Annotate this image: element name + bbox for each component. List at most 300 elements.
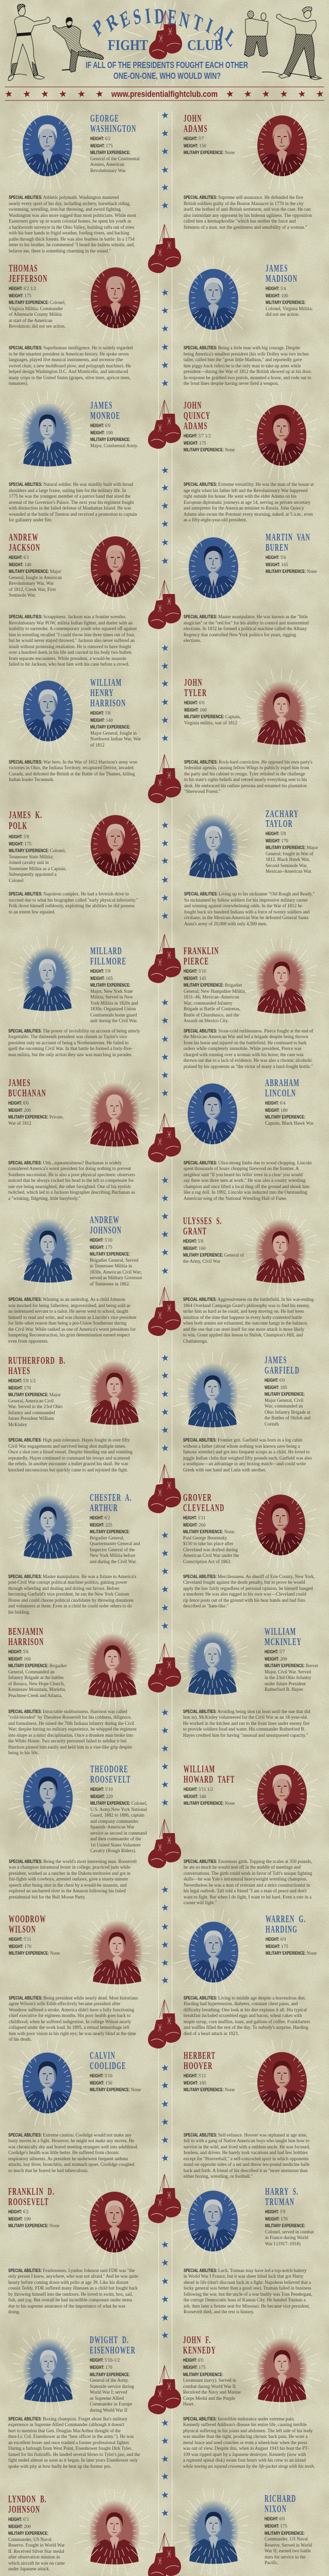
name and stats: Continentals home guard bbox=[90, 1012, 137, 1018]
name and stats: 175 bbox=[105, 1245, 112, 1250]
special abilities bbox=[8, 2575, 138, 2576]
name and stats: ANDREW JOHNSON bbox=[90, 1214, 122, 1235]
special abilities: insult without promising retaliation. He is rumored to have fought bbox=[9, 644, 131, 649]
panel: Richard Nixon bbox=[172, 2485, 329, 2576]
special abilities bbox=[8, 2416, 140, 2469]
special abilities: Winning as an underdog. As a child Johnson bbox=[43, 1297, 125, 1302]
name and stats: Tennessee Militia as a Captain. bbox=[9, 866, 67, 871]
special abilities: corner will fight." bbox=[184, 1900, 217, 1905]
name and stats bbox=[90, 400, 138, 448]
special abilities: either boxing, wrestling, or football." bbox=[184, 2174, 253, 2179]
name and stats: General, fought in American bbox=[9, 575, 62, 580]
special abilities: was mocked for being fatherless, impoverished, and being sold as bbox=[8, 1303, 130, 1308]
name and stats: General; fought in War of bbox=[266, 851, 314, 856]
special abilities bbox=[9, 759, 137, 783]
name and stats: 145 bbox=[199, 976, 206, 981]
special abilities bbox=[184, 2268, 312, 2315]
name and stats bbox=[265, 2187, 325, 2247]
special abilities: and waffles filled the rest of the day. To nobody's surprise, Harding bbox=[184, 2025, 308, 2030]
special abilities: spent thousands of hours chopping firewood on the frontier. A bbox=[184, 1166, 299, 1171]
special abilities: a murderer. He was also rugged in his own way—Cleveland could bbox=[183, 1591, 306, 1597]
special abilities: the Mexican-American War and led a brigade despite being thrown bbox=[184, 1034, 308, 1039]
name and stats bbox=[9, 1913, 76, 1957]
name and stats: Reserve. Served in World bbox=[265, 2543, 312, 2548]
special abilities: charged with running over a woman with his horse; the case was bbox=[184, 1052, 304, 1057]
name and stats: MILITARY EXPERIENCE: bbox=[90, 2087, 130, 2092]
special abilities: SPECIAL ABILITIES: bbox=[9, 345, 42, 350]
special abilities: Aggressiveness on the battlefield. In his war-ending bbox=[218, 1297, 314, 1302]
special abilities: many crops to the United States (grapes, olive trees, apricot trees, bbox=[9, 375, 130, 380]
special abilities: Frontier grit. Garfield was born in a log cabin bbox=[218, 1437, 302, 1443]
name and stats: WEIGHT: bbox=[183, 1522, 198, 1528]
name and stats: MILITARY EXPERIENCE: bbox=[266, 1951, 306, 1956]
name and stats: HEIGHT: bbox=[266, 1937, 279, 1942]
special abilities bbox=[184, 482, 314, 522]
special abilities: described as "ham-like." bbox=[183, 1603, 228, 1608]
name and stats: 5'10 bbox=[105, 2073, 112, 2078]
name and stats: WEIGHT: bbox=[184, 2080, 198, 2086]
panel: James Garfield bbox=[172, 1349, 329, 1473]
name and stats: HEIGHT: bbox=[90, 2073, 104, 2078]
special abilities: the Civil War. While ranked as one of America's worst presidents for bbox=[8, 1327, 136, 1332]
boxer: Washington bbox=[8, 4, 50, 80]
name and stats: and during the Civil War. bbox=[90, 1559, 137, 1564]
special abilities: thrown out due to a lack of evidence. He was also a chronic alcoholic bbox=[184, 1058, 312, 1063]
name and stats: MILITARY EXPERIENCE: bbox=[90, 1251, 130, 1257]
special abilities: War; despite having no military experience, he whipped the regiment bbox=[8, 1726, 137, 1732]
panel: Zachary Taylor bbox=[172, 800, 329, 927]
name and stats: WEIGHT: bbox=[90, 1522, 104, 1528]
special abilities: then-Lt. Col. Eisenhower as the "best officer in the army."). He was bbox=[8, 2434, 134, 2439]
subtitle bbox=[86, 60, 248, 81]
name and stats: None bbox=[307, 1951, 317, 1956]
name and stats: Spanish–American War bbox=[90, 1824, 134, 1829]
name and stats: WARREN G. HARDING bbox=[266, 1913, 306, 1935]
name and stats: None bbox=[50, 2223, 59, 2228]
portrait bbox=[73, 2176, 156, 2268]
panel: Theodore Roosevelt bbox=[0, 1752, 158, 1901]
name and stats bbox=[266, 1913, 329, 1957]
name and stats: War. Served in the 23rd Ohio bbox=[8, 1404, 62, 1409]
special abilities: explored an uncharted river in the Amazon following his failed bbox=[9, 1888, 126, 1893]
special abilities: through wheeling and dealing and doling out favors. Before bbox=[8, 1586, 119, 1591]
name and stats: the Battles of Shiloh and bbox=[265, 1415, 310, 1420]
special abilities: chief executive for eighteen months. His poor health goes back to bbox=[9, 2013, 130, 2018]
special abilities: considered America's worst president for doing nothing to prevent bbox=[8, 1166, 131, 1171]
special abilities bbox=[8, 1574, 136, 1615]
special abilities: the party and his cabinet to resign. Tyler relished in the challenge bbox=[184, 771, 305, 776]
special abilities bbox=[183, 1437, 312, 1473]
name and stats: 6'0 bbox=[279, 2516, 285, 2521]
name and stats: Corinth bbox=[265, 1421, 279, 1427]
name and stats: 190 bbox=[24, 2216, 31, 2222]
special abilities: becoming Garfield's vice president, he ran the New York Custom bbox=[8, 1591, 129, 1597]
name and stats: under Japanese attack. bbox=[8, 2566, 50, 2571]
special abilities: civilians; in the Mexican-American War he defeated General Santa bbox=[184, 915, 308, 920]
special abilities: Living to middle age despite a horrendous diet. bbox=[218, 1995, 306, 2001]
name and stats: Ohio Infantry Brigade at bbox=[265, 1410, 310, 1415]
special abilities: Being president while nearly dead. Most historians bbox=[43, 1995, 138, 2001]
special abilities: to his state's rights beliefs and vetoed nearly everything sent to his bbox=[184, 777, 307, 782]
name and stats: MILITARY EXPERIENCE: bbox=[265, 1663, 305, 1668]
name and stats: 5'11 bbox=[24, 1937, 31, 1942]
special abilities: an excellent boxer and once trashed a former professional fighter. bbox=[8, 2440, 130, 2445]
panel: Millard Fillmore bbox=[0, 933, 158, 1059]
portrait bbox=[7, 1752, 89, 1844]
special abilities: lucky general was better than a good one). Truman failed in business bbox=[184, 2285, 311, 2291]
name and stats: RUTHERFORD B. HAYES bbox=[8, 1355, 65, 1377]
name and stats: WEIGHT: bbox=[90, 2365, 104, 2370]
name and stats: WEIGHT: bbox=[265, 2523, 279, 2529]
name and stats: Virginia militia, war of 1812 bbox=[184, 720, 237, 725]
name and stats: Lieutenant (navy). Served in bbox=[183, 2378, 236, 2383]
name and stats: None bbox=[225, 447, 235, 452]
special abilities: and formalness. He raised the 70th Indiana infantry during the Civil bbox=[8, 1721, 134, 1726]
special abilities: president only on account of being a Northeasterner. He failed to bbox=[8, 1040, 128, 1045]
special abilities: Luck. Truman may have led a top-notch battery bbox=[218, 2268, 306, 2273]
panel: Franklin D. Roosevelt bbox=[0, 2176, 158, 2316]
name and stats: WEIGHT: bbox=[8, 1108, 23, 1113]
special abilities: "cold-blooded" by Theodore Roosevelt for his coldness, diligence, bbox=[8, 1715, 131, 1720]
special abilities: Greek with one hand and Latin with another. bbox=[183, 1467, 266, 1472]
special abilities: magician" or the "red fox" for his ability to control and mastermind bbox=[184, 620, 309, 625]
special abilities: SPECIAL ABILITIES: bbox=[8, 2132, 42, 2138]
special abilities: SPECIAL ABILITIES: bbox=[184, 2132, 217, 2138]
name and stats: WEIGHT: bbox=[9, 562, 23, 567]
special abilities: During a furlough from West Point, Eisenhower fought Dirk Tyler, bbox=[8, 2446, 132, 2451]
name and stats: 170 bbox=[281, 838, 288, 843]
name and stats: WEIGHT: bbox=[266, 1944, 280, 1949]
special abilities: his bidding. bbox=[8, 1609, 30, 1615]
name and stats: MILITARY EXPERIENCE: bbox=[183, 1252, 223, 1258]
special abilities: SPECIAL ABILITIES: bbox=[8, 1437, 42, 1443]
name and stats: Rutherford B. Hayes bbox=[265, 1687, 303, 1692]
panel: John F. Kennedy bbox=[172, 2324, 329, 2470]
special abilities: Intractable stubbornness. Harrison was called bbox=[43, 1709, 127, 1714]
special abilities: SPECIAL ABILITIES: bbox=[184, 891, 218, 896]
special abilities: he ate so much he would nod off in the middle of meetings and bbox=[184, 1865, 301, 1870]
name and stats: Virginia Militia. Commander bbox=[9, 306, 63, 311]
name and stats: HEIGHT: bbox=[9, 286, 23, 291]
portrait bbox=[7, 2324, 90, 2416]
special abilities: famed for his fisticuffs. He landed several blows to Tyler's jaw, and the bbox=[8, 2452, 140, 2457]
name and stats: in Tennessee Militia in bbox=[90, 1263, 132, 1268]
name and stats: Revolutionary War, War bbox=[9, 581, 54, 586]
special abilities: Harrison pinned him easily and held him in a vise-like grip despite bbox=[8, 1744, 132, 1750]
name and stats: 225 bbox=[105, 1522, 112, 1528]
special abilities: from his horse and injured on the battlefield. He continued to bark bbox=[184, 1040, 306, 1045]
panel: George Washington bbox=[8, 103, 140, 253]
name and stats: JOHN QUINCY ADAMS bbox=[184, 400, 210, 432]
name and stats: Commander, US Naval bbox=[265, 2536, 308, 2541]
name and stats: JAMES K. POLK bbox=[9, 809, 42, 832]
name and stats: and company commander. bbox=[90, 1819, 139, 1824]
special abilities: stand on opposite sides of a net and throw ten-pound medicine balls bbox=[184, 2162, 309, 2167]
special abilities: letter to his brother, he commented "I heard the bullets whistle, and, bbox=[9, 242, 135, 247]
special abilities: fearless, and driven. He barely took vacations and had few hobbies bbox=[184, 2150, 308, 2155]
special abilities: when both armies are exhausted, the outcome hangs in the balance, bbox=[183, 1320, 308, 1326]
panel: Calvin Coolidge bbox=[0, 2037, 158, 2174]
name and stats: stars for service in the bbox=[265, 2554, 305, 2560]
name and stats: Kennesaw Mountain, Marietta, bbox=[8, 1687, 66, 1692]
special abilities: Roosevelt died, and the rest is history. bbox=[184, 2309, 254, 2314]
special abilities: and the one that can steel itself for one more attack is more likely bbox=[183, 1327, 304, 1332]
name and stats bbox=[184, 1764, 275, 1807]
name and stats: LYNDON B. JOHNSON bbox=[8, 2494, 47, 2515]
special abilities bbox=[184, 891, 315, 927]
name and stats: JAMES GARFIELD bbox=[265, 1354, 300, 1376]
name and stats: Infantry and commanded bbox=[8, 1410, 55, 1415]
name and stats: HERBERT HOOVER bbox=[184, 2049, 216, 2071]
name and stats: 340 bbox=[199, 1794, 206, 1799]
special abilities: with distinction in the failed defense of Manhattan Island. He was bbox=[9, 505, 131, 511]
portrait bbox=[171, 1616, 254, 1709]
name and stats: WEIGHT: bbox=[90, 1794, 105, 1799]
special abilities: desk. He embraced his outlaw persona and renamed his plantation bbox=[184, 783, 307, 788]
special abilities: job, then later a Senate seat for Missouri. He became vice president, bbox=[184, 2303, 310, 2309]
portrait bbox=[239, 1479, 322, 1571]
name and stats: MILITARY EXPERIENCE: bbox=[265, 1114, 305, 1120]
special abilities: by throwing himself into the outdoors. He loved to swim, box, sail, bbox=[8, 2292, 133, 2297]
special abilities: nearly every sport of his day, including archery, horseback riding, bbox=[9, 201, 130, 206]
name and stats: HEIGHT: bbox=[90, 136, 104, 141]
name and stats: MILITARY EXPERIENCE: bbox=[90, 1529, 130, 1534]
name and stats: Brigadier General, bbox=[90, 1535, 124, 1540]
special abilities: hearty before coming down with polio at age 39. Like his distant bbox=[8, 2280, 128, 2285]
name and stats: DWIGHT D. EISENHOWER bbox=[90, 2334, 136, 2356]
special abilities: presidential bid for the Bull Moose Party. bbox=[9, 1894, 86, 1900]
special abilities: Napoleon complex. He had a feverish drive to bbox=[43, 891, 129, 896]
name and stats: MILITARY EXPERIENCE: bbox=[184, 714, 224, 719]
name and stats: MILLARD FILLMORE bbox=[90, 945, 126, 967]
special abilities: Master manipulator. He was known as the "little bbox=[218, 614, 308, 619]
special abilities: his legal outlook. Taft told a friend "I am a man of peace and don't bbox=[184, 1888, 307, 1893]
name and stats: Brigadier bbox=[225, 982, 242, 988]
name and stats: WEIGHT: bbox=[183, 1246, 198, 1251]
name and stats: McKinley bbox=[8, 1422, 27, 1427]
name and stats: Inspector General of the bbox=[90, 1547, 135, 1552]
name and stats: WEIGHT: bbox=[90, 718, 105, 723]
special abilities: Avoiding being shot (at least until the one that did bbox=[218, 1709, 310, 1714]
name and stats: 185 bbox=[199, 2080, 206, 2086]
special abilities: being America's smallest president (his wife Dolley was two inches bbox=[184, 351, 309, 357]
portrait bbox=[172, 1906, 255, 1998]
name and stats: JAMES MONROE bbox=[90, 400, 120, 421]
name and stats: Second Seminole War, bbox=[266, 863, 307, 868]
special abilities: fell in with a gang of Native American boys who taught him how to bbox=[184, 2138, 309, 2143]
name and stats: HEIGHT: bbox=[90, 2358, 104, 2363]
name and stats: 175 bbox=[199, 2365, 206, 2370]
name and stats: HEIGHT: bbox=[90, 1515, 104, 1520]
name and stats: MILITARY EXPERIENCE: bbox=[90, 1801, 130, 1806]
name and stats: 5'7 bbox=[279, 1649, 285, 1654]
special abilities: helped design Washington D.C. And Monticello, and introduced bbox=[9, 369, 128, 374]
panel: Andrew Jackson bbox=[0, 520, 158, 668]
subtitle: ONE-ON-ONE, WHO WOULD WIN? bbox=[113, 71, 221, 81]
name and stats: ZACHARY TAYLOR bbox=[266, 808, 299, 829]
name and stats bbox=[8, 1078, 76, 1126]
name and stats: MILITARY EXPERIENCE: bbox=[184, 2087, 224, 2092]
portrait bbox=[241, 2036, 323, 2129]
name and stats: of 1812 bbox=[90, 742, 105, 748]
special abilities: Woodrow suffered a stroke. America didn't have a fully functioning bbox=[9, 2007, 134, 2012]
special abilities: firmness of a man, nor the gentleness and sensibility of a woman." bbox=[184, 225, 307, 230]
name and stats: None bbox=[307, 569, 317, 574]
portrait bbox=[171, 1349, 254, 1442]
name and stats: 200 bbox=[24, 2524, 31, 2529]
special abilities: Uhh...squeamishness? Buchanan is widely bbox=[43, 1160, 122, 1165]
name and stats: HEIGHT: bbox=[265, 2209, 279, 2214]
name and stats bbox=[265, 1626, 329, 1693]
special abilities: for little other reason than being a pro-Union Southerner during bbox=[8, 1320, 126, 1326]
special abilities: Fearlessness. Lyndon Johnson said FDR was "the bbox=[43, 2268, 135, 2273]
portrait bbox=[6, 933, 89, 1025]
name and stats: HEIGHT: bbox=[90, 710, 104, 716]
special abilities: a ruptured spinal disk) swam four hours with his crew to an island bbox=[183, 2458, 306, 2463]
special abilities: physical suffering in his joints and abdomen. The left side of his body bbox=[183, 2428, 312, 2433]
name and stats: MILITARY EXPERIENCE: bbox=[184, 447, 224, 452]
name and stats: Reserve. Fought in World War bbox=[8, 2543, 64, 2548]
panel: Chester A. Arthur bbox=[0, 1480, 158, 1615]
special abilities: orders while completely immobile. While president, Pierce was bbox=[184, 1046, 302, 1051]
name and stats: Cavalry (Rough Riders). bbox=[90, 1848, 136, 1853]
special abilities: fight ended almost as soon as it began. In later years Eisenhower only bbox=[8, 2458, 138, 2463]
name and stats bbox=[9, 532, 65, 599]
special abilities: inability to surrender. A contemporary youth who squared off against bbox=[9, 626, 137, 631]
name and stats: 1812, Black Hawk War, bbox=[266, 857, 310, 862]
special abilities: succeed due to what his biographer called "early physical inferiority." bbox=[9, 897, 138, 903]
portrait bbox=[239, 1205, 322, 1297]
name and stats bbox=[90, 2050, 155, 2093]
portrait bbox=[172, 2485, 255, 2576]
special abilities bbox=[183, 2416, 315, 2469]
panel: Herbert Hoover bbox=[172, 2036, 329, 2180]
special abilities: Nevertheless he was a man of restraint and a strict constructionist in bbox=[184, 1883, 310, 1888]
name and stats: Major bbox=[50, 1392, 61, 1397]
name and stats: 200 bbox=[280, 1656, 287, 1662]
special abilities: British soldiers guilty of the Boston Massacre in 1770 in the city bbox=[184, 201, 304, 206]
special abilities: an indentured servant to a tailor. He never went to school, taught bbox=[8, 1309, 128, 1314]
panel: Thomas Jefferson bbox=[9, 255, 155, 386]
special abilities: except for "Hooverball," a self-concocted sport in which opponents bbox=[184, 2156, 309, 2161]
panel: Harry S. Truman bbox=[172, 2175, 329, 2316]
name and stats: General of the Army. bbox=[90, 2378, 129, 2383]
special abilities: conversations. The girth could work in favor of Taft's unique fighting bbox=[184, 1871, 312, 1876]
special abilities: being in his 50s. bbox=[8, 1750, 39, 1755]
name and stats: MILITARY EXPERIENCE: bbox=[9, 1951, 49, 1956]
name and stats: MILITARY EXPERIENCE: bbox=[266, 845, 306, 850]
name and stats: MILITARY EXPERIENCE: bbox=[9, 848, 49, 853]
special abilities: SPECIAL ABILITIES: bbox=[184, 195, 217, 200]
panel: Ulysses S. Grant bbox=[172, 1205, 329, 1345]
name and stats: 5'9 bbox=[105, 969, 110, 974]
name and stats: War; commanded Infantry bbox=[184, 1001, 233, 1006]
name and stats bbox=[9, 263, 65, 329]
special abilities: himself to read and write, and was chosen as Lincoln's vice president bbox=[8, 1315, 137, 1320]
special abilities: difficulty breathing. One look at his diet explains it all. His typical bbox=[184, 2007, 307, 2012]
special abilities: respiratory ailments. As president he underwent frequent asthma bbox=[8, 2156, 128, 2161]
special abilities: hasty moves in a fight. However, he might not make any moves. He bbox=[8, 2138, 134, 2143]
name and stats: 1831–46; Mexican–American bbox=[184, 994, 239, 999]
panel: William McKinley bbox=[172, 1616, 329, 1739]
name and stats: WEIGHT: bbox=[90, 976, 105, 981]
special abilities: SPECIAL ABILITIES: bbox=[8, 1574, 42, 1579]
name and stats: 5'8 bbox=[281, 831, 286, 836]
name and stats: WILLIAM HOWARD TAFT bbox=[184, 1763, 235, 1785]
special abilities: Extreme caution. Coolidge would not make any bbox=[43, 2132, 131, 2138]
special abilities: Scrappiness. Jackson was a frontier wrestler, bbox=[43, 614, 126, 619]
special abilities: federalist agenda, causing fellow Whigs to publicly expel him from bbox=[184, 765, 309, 770]
name and stats bbox=[184, 2050, 241, 2093]
panel: James Monroe bbox=[8, 391, 138, 522]
special abilities: "Sherwood Forest." bbox=[184, 789, 221, 794]
name and stats: World War I; served bbox=[90, 2389, 127, 2395]
name and stats: HEIGHT: bbox=[265, 1649, 278, 1654]
portrait bbox=[7, 1204, 89, 1297]
name and stats bbox=[266, 532, 329, 575]
special abilities: was chronically shy and feared meeting strangers well into adulthood. bbox=[8, 2144, 138, 2149]
name and stats: WEIGHT: bbox=[90, 2080, 104, 2086]
name and stats: None bbox=[50, 1951, 60, 1956]
name and stats: served as Military Governor bbox=[90, 1275, 142, 1280]
panel: Andrew Johnson bbox=[0, 1204, 158, 1344]
special abilities bbox=[183, 1297, 314, 1344]
name and stats: Conscription Act of 1863. bbox=[183, 1559, 231, 1564]
name and stats: WEIGHT: bbox=[265, 1108, 279, 1113]
name and stats: None bbox=[225, 1801, 235, 1806]
name and stats: Peachtree Creek and Atlanta. bbox=[8, 1693, 62, 1698]
name and stats: 6'3 bbox=[23, 2517, 28, 2522]
special abilities: agree Wilson's wife Edith effectively became president after bbox=[9, 2001, 121, 2006]
name and stats: HEIGHT: bbox=[90, 423, 104, 428]
name and stats: 5'7 1/2 bbox=[199, 433, 211, 438]
name and stats: Pacific. bbox=[265, 2560, 278, 2565]
panel: James Madison bbox=[174, 256, 312, 386]
name and stats: WEIGHT: bbox=[184, 440, 198, 446]
name and stats: Heart. bbox=[183, 2401, 194, 2406]
name and stats bbox=[265, 2494, 321, 2566]
name and stats: 160 bbox=[200, 707, 207, 713]
name and stats: None bbox=[225, 2087, 235, 2092]
name and stats bbox=[90, 946, 155, 1024]
special abilities: in World War I France, but it was sheer blind luck that got Harry bbox=[184, 2274, 303, 2279]
name and stats bbox=[183, 1492, 257, 1565]
panel: John Adams bbox=[184, 103, 322, 230]
special abilities bbox=[183, 1709, 310, 1738]
special abilities bbox=[183, 1574, 315, 1609]
name and stats: MILITARY EXPERIENCE: bbox=[9, 300, 49, 305]
special abilities: collapsed under the work load. In 1895, a retinal hemorrhage left bbox=[9, 2025, 129, 2030]
special abilities: elections. bbox=[184, 638, 201, 643]
special abilities: maple syrup, corn muffins, toast, and gallons of coffee. Frankfurters bbox=[184, 2019, 310, 2024]
name and stats: 160 bbox=[199, 1246, 206, 1251]
name and stats: 5'8 1/2 bbox=[23, 1378, 36, 1383]
name and stats: HEIGHT: bbox=[183, 2358, 197, 2363]
name and stats: WEIGHT: bbox=[9, 841, 23, 846]
title: Fight: FIGHT bbox=[108, 37, 148, 54]
name and stats: during World War II bbox=[90, 2408, 127, 2413]
special abilities: Chattanooga. bbox=[183, 1338, 208, 1344]
name and stats: Major, Civil War. Served bbox=[265, 1669, 311, 1674]
special abilities: rip fence posts out of the ground with his bear hands and had fists bbox=[183, 1598, 305, 1603]
name and stats: HEIGHT: bbox=[184, 1787, 198, 1792]
name and stats: of Albemarle County Militia bbox=[9, 312, 62, 317]
special abilities: victories in Ohio, the Indiana Territory, recaptured Detriot, invaded bbox=[9, 765, 134, 770]
special abilities: Being a little man with big courage. Despite bbox=[218, 345, 300, 350]
special abilities bbox=[184, 2132, 310, 2180]
name and stats: MARTIN VAN BUREN bbox=[266, 532, 310, 553]
special abilities bbox=[184, 195, 312, 230]
